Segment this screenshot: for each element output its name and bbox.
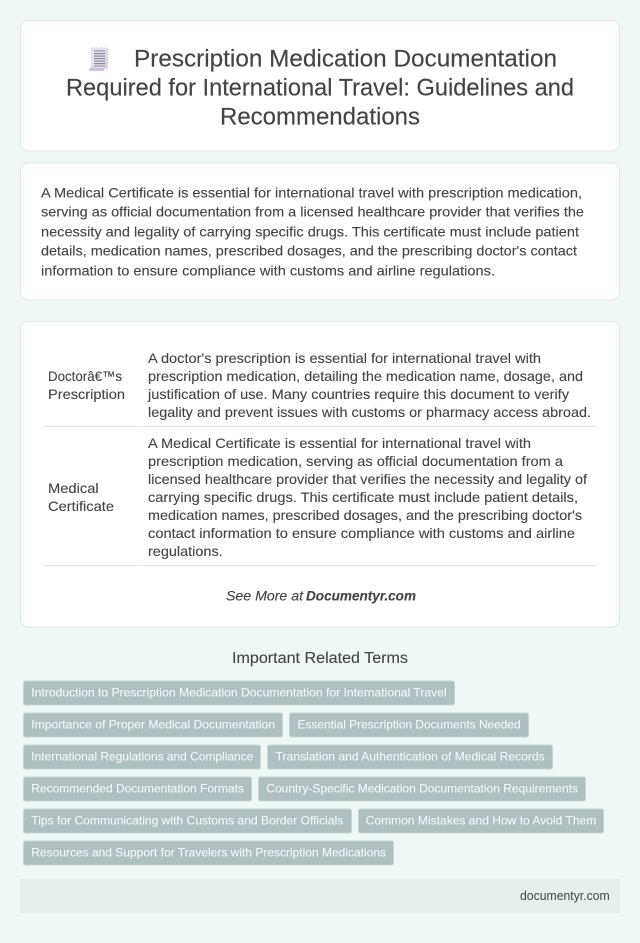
- table row: medical certificate: [48, 435, 587, 559]
- table row: doctor's prescription: Prescription: [48, 386, 125, 402]
- heading: related terms: Important Related Terms: [232, 650, 408, 667]
- summary text: serving as official documentation from a licensed healthcare provider that verifies the: [41, 204, 584, 220]
- chip: [24, 713, 282, 737]
- chip: Essential Prescription Documents Needed: [298, 718, 521, 732]
- summary text: necessity and legality of carrying specific drugs. This certificate must include patient: [41, 223, 579, 239]
- chip: Country-Specific Medication Documentation Requirements: [266, 782, 578, 796]
- see more link: See More at: [226, 588, 304, 604]
- chip: [24, 777, 252, 801]
- panel: documents table: [20, 322, 620, 627]
- table row: doctor's prescription: A doctor's prescription is essential for international travel with: [148, 350, 541, 366]
- chip: Tips for Communicating with Customs and Border Officials: [31, 814, 343, 828]
- chip: Resources and Support for Travelers with Prescription Medications: [31, 846, 386, 860]
- panel: summary: [20, 163, 620, 300]
- table row: doctor's prescription: [48, 350, 591, 420]
- table row: medical certificate: medication names, prescribed dosages, and the prescribing doctor's: [148, 507, 582, 523]
- summary text: [41, 184, 584, 278]
- title: Prescription Medication Documentation: [134, 46, 557, 72]
- table row: medical certificate: prescription medication, serving as official documentation from a: [148, 453, 563, 469]
- table row: medical certificate: licensed healthcare provider that verifies the necessity and legality of: [148, 471, 587, 487]
- table row: medical certificate: regulations.: [148, 543, 223, 559]
- footer: documentyr.com: [520, 888, 610, 903]
- table row: medical certificate: Certificate: [48, 498, 114, 514]
- chip: [24, 745, 260, 769]
- chip: Common Mistakes and How to Avoid Them: [366, 814, 596, 828]
- table row: doctor's prescription: justification of use. Many countries require this document to verify: [147, 386, 569, 402]
- table row: medical certificate: Medical: [48, 480, 99, 496]
- chip: [24, 809, 352, 833]
- table row: doctor's prescription: legality and prevent issues with customs or pharmacy access abroad.: [148, 404, 591, 420]
- title: [66, 46, 574, 130]
- summary text: details, medication names, prescribed dosages, and the prescribing doctor's contact: [41, 243, 577, 259]
- icon: prescription receipt: [89, 47, 108, 71]
- table row: doctor's prescription: prescription medication, detailing the medication name, dosage, and: [148, 368, 583, 384]
- chip: Introduction to Prescription Medication Documentation for International Travel: [31, 686, 447, 700]
- chip: Recommended Documentation Formats: [31, 782, 244, 796]
- see more link: [226, 588, 416, 604]
- table row: medical certificate: carrying specific drugs. This certificate must include patient details,: [148, 489, 578, 505]
- table row: medical certificate: A Medical Certificate is essential for international travel with: [148, 435, 531, 451]
- see more link: Documentyr.com: [306, 588, 416, 604]
- table row: medical certificate: contact information to ensure compliance with customs and airline: [148, 525, 575, 541]
- chip: [290, 713, 528, 737]
- chip: [24, 681, 454, 705]
- chip: [268, 745, 552, 769]
- chip: [258, 777, 586, 801]
- title: Recommendations: [220, 104, 420, 130]
- chip: Translation and Authentication of Medical Records: [276, 750, 545, 764]
- chip: [358, 809, 604, 833]
- title: Required for International Travel: Guidelines and: [66, 74, 574, 102]
- chip: [24, 841, 394, 865]
- chip: Importance of Proper Medical Documentation: [31, 718, 275, 732]
- summary text: information to ensure compliance with customs and airline regulations.: [41, 262, 495, 278]
- chip: International Regulations and Compliance: [31, 750, 254, 764]
- panel: related term chips: [24, 681, 604, 865]
- panel: title card: [20, 20, 620, 151]
- summary text: A Medical Certificate is essential for international travel with prescription medication,: [41, 184, 582, 200]
- table row: doctor's prescription: Doctorâ€™s: [48, 368, 122, 384]
- footer: [20, 879, 620, 913]
